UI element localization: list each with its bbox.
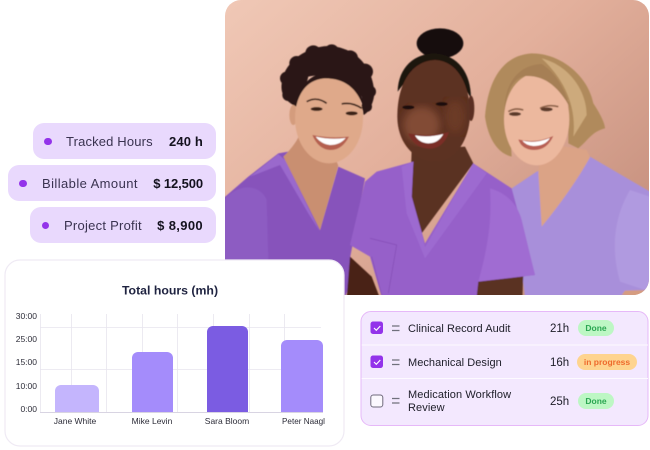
x axis labels: Peter Naagl bbox=[282, 416, 325, 426]
task row: clinical record audit: 21h bbox=[550, 323, 569, 335]
y axis labels bbox=[16, 311, 37, 414]
stat pill: project profit: Project Profit bbox=[64, 218, 142, 233]
woman 2 bbox=[417, 28, 463, 58]
stat pill: project profit bbox=[30, 207, 216, 243]
task row: clinical record audit: Clinical Record Audit bbox=[408, 323, 511, 335]
x axis labels: Jane White bbox=[54, 416, 97, 426]
woman 1 bbox=[223, 152, 365, 297]
stat pill: billable amount bbox=[8, 165, 216, 201]
stat pill: billable amount: $ 12,500 bbox=[153, 176, 203, 191]
y axis labels: 10:00 bbox=[16, 381, 37, 391]
task row: mechanical design: 16h bbox=[550, 357, 569, 369]
task row: medication workflow review bbox=[371, 389, 614, 414]
bars bbox=[55, 326, 323, 412]
task row: clinical record audit bbox=[370, 320, 614, 336]
stat pill: tracked hours: Tracked Hours bbox=[66, 134, 153, 149]
y axis labels: 0:00 bbox=[20, 404, 37, 414]
y axis labels: 30:00 bbox=[16, 311, 37, 321]
chart grid bbox=[40, 314, 321, 412]
woman 3 bbox=[512, 157, 650, 297]
x axis labels: Mike Levin bbox=[132, 416, 173, 426]
task row: medication workflow review: Review bbox=[408, 402, 445, 414]
task row: mechanical design: Mechanical Design bbox=[408, 357, 502, 369]
x axis labels bbox=[54, 416, 325, 426]
chart title: Total hours (mh) bbox=[122, 284, 218, 298]
stat pill: tracked hours: 240 h bbox=[169, 134, 203, 149]
photo: three smiling nurses in purple scrubs bbox=[225, 0, 649, 295]
stat pill: project profit: $ 8,900 bbox=[157, 218, 203, 233]
task row: mechanical design bbox=[370, 354, 637, 370]
task row: clinical record audit: Done bbox=[585, 323, 607, 333]
task row: mechanical design: in progress bbox=[584, 357, 630, 367]
task row: medication workflow review: Done bbox=[585, 396, 607, 406]
stat pill: tracked hours bbox=[33, 123, 216, 159]
stat pill: billable amount: Billable Amount bbox=[42, 176, 138, 191]
x axis labels: Sara Bloom bbox=[205, 416, 249, 426]
task row: medication workflow review: Medication Workflow bbox=[408, 389, 511, 401]
y axis labels: 25:00 bbox=[16, 334, 37, 344]
task row: medication workflow review: 25h bbox=[550, 396, 569, 408]
y axis labels: 15:00 bbox=[16, 357, 37, 367]
